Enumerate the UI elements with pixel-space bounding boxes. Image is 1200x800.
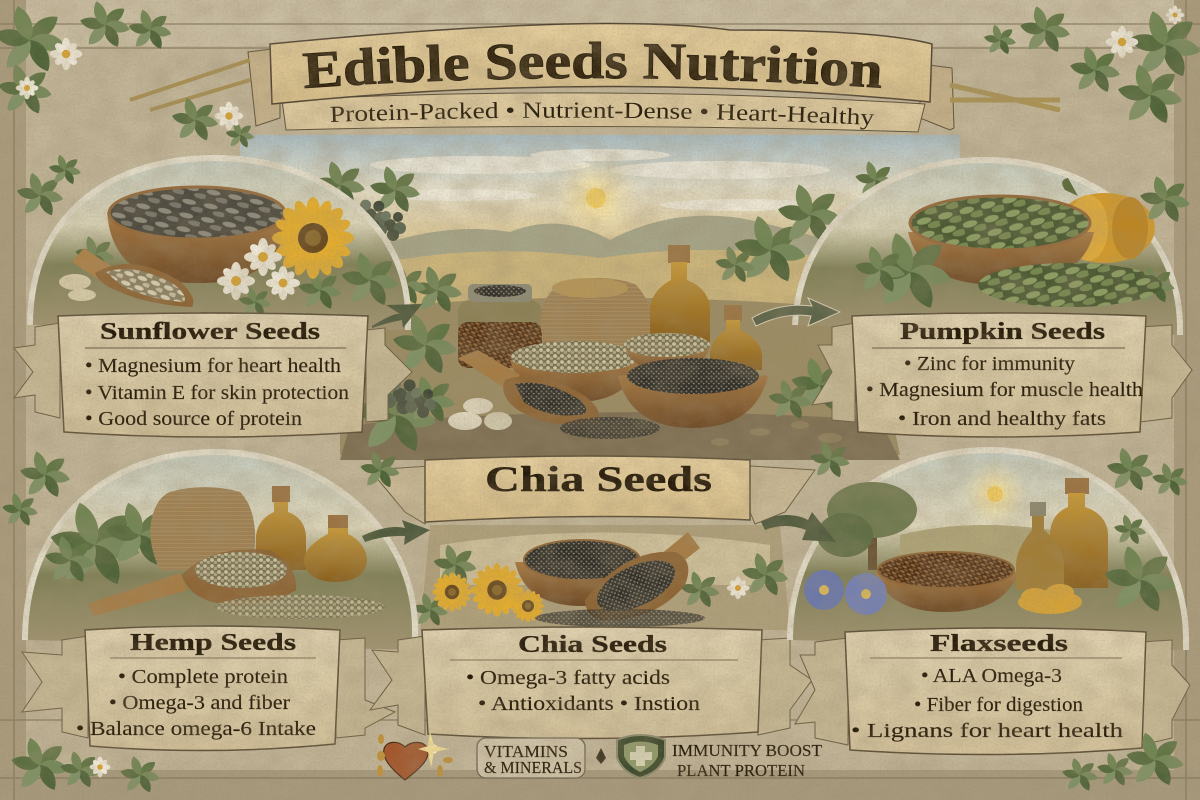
ribbon ends: [248, 48, 954, 130]
mountains: [380, 216, 860, 290]
card: hemp seeds: • Omega-3 and fiber: [109, 692, 290, 714]
icon: diamond: [596, 748, 606, 764]
sunflowers: [432, 563, 749, 622]
upper band: [270, 24, 932, 104]
small bowl: [624, 333, 710, 372]
side foliage: [1, 154, 1191, 527]
arrow: sunflower to centre: [372, 304, 422, 328]
card: pumpkin seeds: Pumpkin Seeds: [900, 319, 1105, 345]
banner: chia seeds heading: Chia Seeds: [485, 459, 712, 499]
green seed pile: [978, 263, 1162, 307]
card: sunflower seeds: • Good source of protein: [85, 408, 302, 430]
oil bottles: [1016, 478, 1108, 590]
foliage: [75, 235, 400, 318]
arch frame: [790, 450, 1186, 650]
arrow: centre to pumpkin: [752, 298, 840, 326]
central landscape scene: [240, 135, 960, 460]
arch frame: [795, 160, 1180, 335]
title banner: [248, 22, 954, 132]
clouds: [370, 149, 830, 211]
text: immunity and plant protein: PLANT PROTEIN: [677, 761, 805, 780]
ribbon tails: sunflower: [14, 323, 412, 422]
panel: chia scene: [411, 525, 790, 630]
panel: sunflower seeds: [30, 158, 408, 330]
bowl: [515, 540, 650, 606]
title: Edible Seeds Nutrition: [302, 42, 882, 88]
oil bottle large: [650, 245, 710, 342]
icon: heart: [377, 731, 453, 780]
card: hemp seeds: • Balance omega-6 Intake: [76, 718, 316, 740]
card: sunflower seeds: Sunflower Seeds: [100, 319, 320, 345]
text: immunity and plant protein: IMMUNITY BOOST: [672, 741, 823, 760]
spilled seeds and stones: [448, 398, 842, 446]
oil bottle small: [710, 305, 762, 370]
ribbon tails: chia card: [370, 636, 812, 735]
foliage around central scene: [314, 160, 895, 455]
subtitle: Protein-Packed • Nutrient-Dense • Heart-Healthy: [330, 102, 874, 130]
panel: flaxseeds: [790, 450, 1186, 650]
tree: [817, 482, 917, 570]
card: chia seeds: • Omega-3 fatty acids: [466, 667, 670, 689]
card: pumpkin seeds: • Magnesium for muscle health: [866, 379, 1143, 401]
badge: vitamins and minerals: & MINERALS: [484, 758, 582, 777]
benefits strip: [377, 731, 823, 780]
leaves: [44, 500, 175, 589]
corner florals: top right: [950, 5, 1200, 126]
spilled seeds: [215, 595, 385, 619]
leaves: [1103, 514, 1177, 615]
badge: vitamins and minerals: VITAMINS: [484, 742, 568, 761]
card: hemp seeds: • Complete protein: [118, 666, 288, 688]
arch frame: [25, 452, 415, 650]
ground: [340, 298, 900, 455]
hills: [900, 525, 1090, 575]
text: immunity and plant protein: [672, 741, 823, 780]
pumpkin: [1055, 178, 1155, 263]
panel: hemp seeds: [25, 452, 415, 650]
card: chia seeds: • Antioxidants • Instion: [478, 693, 700, 715]
foliage: [411, 543, 789, 627]
turmeric: [1018, 584, 1082, 614]
badge: vitamins and minerals: [477, 738, 585, 778]
scoop with hemp seeds: [88, 549, 296, 616]
bowl: [908, 196, 1094, 285]
ribbon tails: hemp: [22, 636, 395, 738]
bowl: [875, 552, 1018, 612]
leaves: [854, 230, 1175, 312]
card: chia seeds: Chia Seeds: [518, 632, 667, 658]
card: flaxseeds: • Fiber for digestion: [914, 694, 1083, 716]
ribbon tails: pumpkin: [812, 323, 1192, 422]
card: flaxseeds: • Lignans for heart health: [851, 720, 1123, 742]
card: sunflower seeds: [58, 313, 368, 437]
lower band: [282, 93, 925, 132]
bowl: [107, 187, 287, 283]
blue flowers: [804, 570, 887, 615]
sun: [961, 460, 1029, 528]
card: chia seeds: [422, 627, 762, 739]
arrow: hemp to chia: [362, 520, 430, 545]
sun: [552, 154, 640, 242]
corner florals: bottom right: [1061, 731, 1185, 792]
bowl of light seeds: [510, 341, 640, 402]
card: hemp seeds: [76, 626, 340, 751]
sky: [240, 135, 960, 310]
burlap sack: [150, 487, 255, 570]
card: pumpkin seeds: • Zinc for immunity: [904, 353, 1075, 375]
card: pumpkin seeds: • Iron and healthy fats: [898, 408, 1106, 430]
spilled seeds: [535, 609, 705, 627]
daisies: [217, 238, 300, 300]
card: flaxseeds: • ALA Omega-3: [921, 665, 1062, 687]
icon: shield: [617, 735, 665, 778]
banner: chia seeds heading: [370, 456, 815, 524]
oil bottles: [256, 486, 367, 582]
card: sunflower seeds: • Vitamin E for skin protection: [85, 382, 349, 404]
burlap sack: [540, 278, 651, 345]
chia bowl: [618, 358, 768, 428]
card: hemp seeds: Hemp Seeds: [130, 630, 296, 656]
corner florals: bottom left: [10, 736, 160, 794]
corner florals: top left: [0, 0, 255, 149]
ribbon tails: flaxseeds: [795, 638, 1190, 745]
sunflower: [272, 197, 354, 279]
panel: pumpkin seeds: [795, 160, 1180, 335]
card: sunflower seeds: • Magnesium for heart health: [85, 355, 341, 377]
wooden scoop: [458, 350, 599, 424]
card: flaxseeds: [845, 628, 1146, 755]
arch frame: [30, 158, 408, 330]
card: flaxseeds: Flaxseeds: [930, 631, 1068, 657]
scoop: [585, 532, 700, 622]
seed jar: [458, 284, 542, 368]
card: pumpkin seeds: [852, 313, 1146, 437]
scoop: [59, 248, 193, 307]
arrow: chia to flaxseeds: [760, 512, 836, 542]
